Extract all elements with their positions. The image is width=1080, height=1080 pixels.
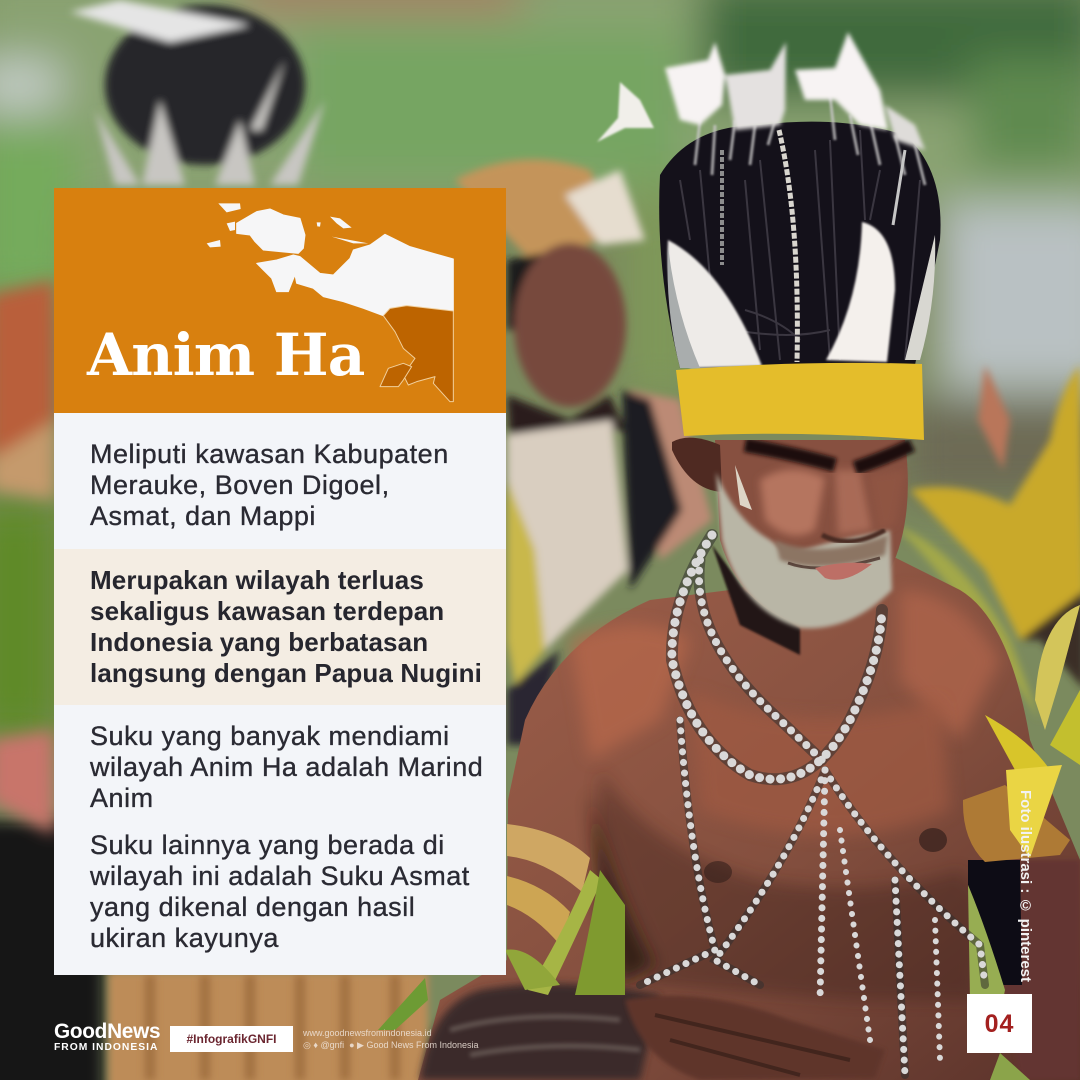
man: arm bands and foliage — [378, 605, 1080, 1030]
logo: GoodNews from Indonesia — [54, 1020, 160, 1053]
man: head and beard — [672, 438, 912, 655]
text: largest and frontier territory: langsung dengan Papua Nugini — [90, 658, 482, 688]
panel: highlighted fact — [54, 549, 506, 705]
text: largest and frontier territory — [90, 565, 482, 688]
page number — [967, 994, 1032, 1053]
photo credit: Foto ilustrasi : © pinterest — [1017, 790, 1034, 982]
loose white feather at left — [597, 82, 654, 142]
text: largest and frontier territory: sekaligus kawasan terdepan — [90, 596, 444, 626]
text: Asmat tribe: wilayah ini adalah Suku Asmat — [90, 861, 470, 891]
text: Marind Anim tribe: wilayah Anim Ha adalah Marind — [90, 752, 483, 782]
text: Asmat tribe: ukiran kayunya — [90, 923, 279, 953]
blurred background dancer headdress, left — [70, 0, 325, 185]
text: Marind Anim tribe — [90, 721, 483, 813]
man: feather headdress — [597, 32, 941, 440]
text: Marind Anim tribe: Suku yang banyak mendiami — [90, 721, 450, 751]
panel: coverage area — [54, 413, 506, 549]
text: districts covered: Asmat, dan Mappi — [90, 501, 316, 531]
text: largest and frontier territory: Merupakan wilayah terluas — [90, 565, 424, 595]
blurred foliage, right — [895, 365, 1080, 720]
panel: orange header with title and map — [54, 188, 506, 413]
text: Asmat tribe: Suku lainnya yang berada di — [90, 830, 445, 860]
text: districts covered — [90, 439, 449, 531]
title: Anim Ha — [87, 321, 365, 389]
text: districts covered: Merauke, Boven Digoel, — [90, 470, 390, 500]
website and social handles: www.goodnewsfromindonesia.id — [303, 1028, 432, 1038]
text: Asmat tribe: yang dikenal dengan hasil — [90, 892, 415, 922]
text: Asmat tribe — [90, 830, 470, 953]
blurred background dancer, centre — [455, 160, 712, 745]
blurred left-edge dancer costume — [0, 280, 55, 835]
man: bead necklaces — [640, 535, 985, 1075]
hashtag badge — [170, 1026, 293, 1052]
text: districts covered: Meliputi kawasan Kabupaten — [90, 439, 449, 469]
hashtag badge: #InfografikGNFI — [186, 1032, 276, 1046]
text: Marind Anim tribe: Anim — [90, 783, 154, 813]
map of Papua with Anim Ha region highlighted — [206, 203, 454, 402]
text: largest and frontier territory: Indonesia yang berbatasan — [90, 627, 428, 657]
man: torso and arms — [418, 555, 1080, 1080]
website and social handles: ◎ ♦ @gnfi ● ▶ Good News From Indonesia — [303, 1040, 479, 1050]
panel: tribes — [54, 705, 506, 975]
logo: GoodNews from Indonesia: FROM INDONESIA — [54, 1042, 158, 1053]
logo: GoodNews from Indonesia: GoodNews — [54, 1020, 160, 1043]
page number: 04 — [985, 1010, 1014, 1038]
yellow headband — [676, 363, 924, 440]
website and social handles — [303, 1028, 479, 1050]
